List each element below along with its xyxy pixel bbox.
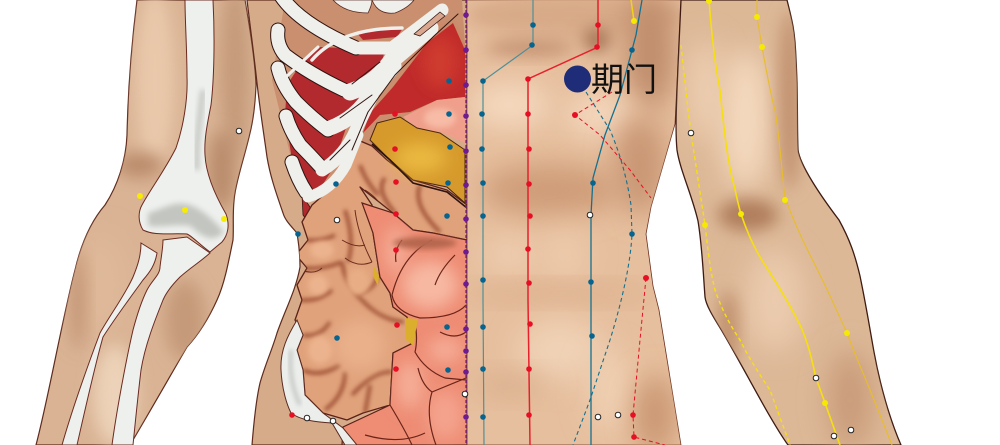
lung bbox=[285, 47, 385, 197]
small fat bbox=[373, 266, 379, 286]
small intestine bbox=[342, 203, 467, 445]
radius bbox=[62, 243, 157, 445]
pancreas bbox=[370, 117, 465, 203]
highlighted point: Qimen marker bbox=[564, 66, 591, 92]
teal meridian near midline bbox=[479, 0, 536, 445]
lower lung sliver bbox=[302, 198, 310, 218]
hip bone bbox=[281, 320, 357, 445]
abdomen right skin bbox=[460, 0, 685, 445]
stomach bbox=[403, 97, 465, 143]
rib cage bbox=[278, 0, 458, 197]
upper lung segment bbox=[358, 30, 402, 40]
colon bbox=[295, 140, 467, 420]
organ side red points bbox=[289, 111, 400, 418]
liver bbox=[363, 23, 465, 133]
label: Qimen: 期门 bbox=[591, 61, 657, 98]
white points bbox=[236, 128, 854, 439]
dashed teal meridian bbox=[573, 92, 635, 445]
ulna bbox=[112, 237, 210, 445]
mesentery fat bbox=[405, 318, 418, 346]
ribs and cartilage bbox=[278, 0, 458, 197]
midline meridian: purple dashed bbox=[463, 0, 469, 445]
left arm yellow points bbox=[137, 193, 227, 222]
chest cavity bbox=[272, 0, 466, 195]
yellow meridians on right arm bbox=[681, 0, 892, 445]
red stomach meridian bbox=[525, 0, 601, 445]
humerus bbox=[139, 0, 228, 252]
left arm bbox=[36, 0, 256, 445]
right arm bbox=[676, 0, 901, 445]
organs bbox=[272, 0, 467, 445]
yellow line at chest bbox=[631, 0, 637, 24]
organ side teal points bbox=[295, 78, 453, 373]
sternum window bbox=[414, 12, 445, 36]
blue spleen meridian bbox=[588, 0, 642, 445]
torso left side base bbox=[247, 0, 467, 445]
sternum top bbox=[333, 0, 414, 13]
left arm bones bbox=[62, 0, 228, 445]
dashed red meridians bbox=[572, 92, 665, 445]
